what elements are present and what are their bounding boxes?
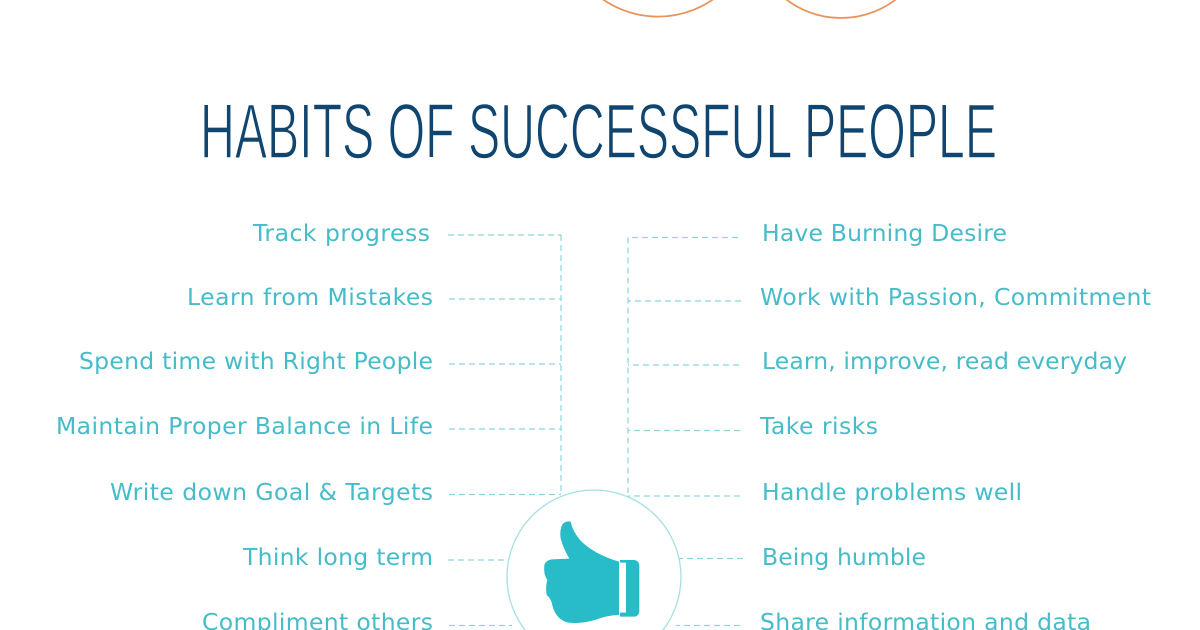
right habits list: Work with Passion, Commitment: [760, 283, 1151, 311]
left connector lines: [448, 235, 561, 626]
left habits list: Write down Goal & Targets: [110, 478, 433, 506]
right habits list: Handle problems well: [762, 478, 1022, 506]
right connector lines: [628, 238, 743, 626]
right habits list: [759, 219, 1151, 630]
left habits list: [56, 219, 433, 630]
center circle: [507, 490, 681, 630]
right habits list: Take risks: [759, 412, 878, 440]
left habits list: Learn from Mistakes: [187, 283, 433, 311]
right habits list: Have Burning Desire: [762, 219, 1007, 247]
decorative orange circle left: [561, 0, 755, 17]
right habits list: Being humble: [762, 543, 926, 571]
icon: thumbs up: [544, 521, 639, 623]
left habits list: Maintain Proper Balance in Life: [56, 412, 433, 440]
left habits list: Think long term: [242, 543, 433, 571]
left habits list: Track progress: [252, 219, 430, 247]
left habits list: Spend time with Right People: [79, 347, 433, 375]
right habits list: Learn, improve, read everyday: [762, 347, 1127, 375]
decorative orange circle right: [751, 0, 931, 18]
